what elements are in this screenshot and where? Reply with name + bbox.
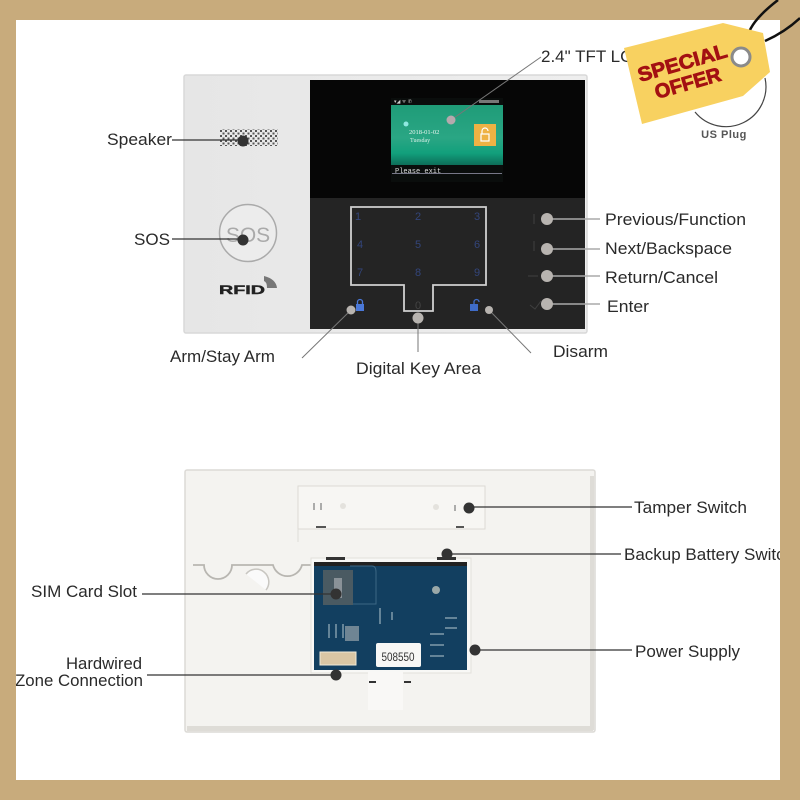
key digits: 5	[415, 239, 421, 251]
special offer tag	[624, 0, 800, 124]
digital key outline	[351, 207, 486, 311]
callout labels: Power Supply	[635, 642, 740, 661]
LCD screen: 2018-01-02	[409, 129, 439, 136]
SIM holder	[323, 570, 353, 605]
small chip	[345, 626, 359, 641]
keypad fascia	[310, 198, 585, 329]
callout labels: SOS	[134, 230, 170, 249]
LCD screen: Tuesday	[410, 138, 430, 144]
callout labels: Enter	[607, 297, 649, 316]
SOS button	[220, 204, 276, 262]
PCB: 508550	[382, 650, 415, 664]
LCD screen	[391, 98, 503, 182]
key digits	[355, 211, 480, 312]
callout labels: Backup Battery Switch	[624, 545, 794, 564]
side key glyphs	[528, 214, 541, 309]
callout labels: Hardwired	[66, 654, 142, 673]
key digits: 3	[474, 211, 480, 223]
US plug circle: US Plug	[701, 129, 747, 141]
callout labels: Return/Cancel	[605, 268, 718, 287]
front panel device	[184, 75, 587, 333]
special offer tag: OFFER	[652, 64, 724, 104]
callout labels: SIM Card Slot	[31, 582, 137, 601]
black fascia	[310, 80, 585, 198]
callout labels	[15, 47, 794, 690]
sticker	[376, 643, 421, 667]
RFID logo	[219, 276, 277, 297]
speaker grille	[220, 129, 278, 146]
key digits: 7	[357, 267, 363, 279]
PCB	[311, 557, 471, 673]
key digits: 6	[474, 239, 480, 251]
knockouts	[193, 565, 314, 579]
key digits: 1	[355, 211, 361, 223]
key digits: 4	[357, 239, 363, 251]
LCD screen: ▾◢ ᯤ ✆	[394, 99, 412, 105]
callout dots	[238, 116, 553, 680]
callout labels: Zone Connection	[15, 671, 143, 690]
callout labels: Speaker	[107, 130, 172, 149]
key digits: 9	[474, 267, 480, 279]
lock icons	[356, 300, 479, 311]
SOS button: SOS	[226, 224, 270, 247]
callout labels: Disarm	[553, 342, 608, 361]
callout labels: Next/Backspace	[605, 239, 732, 258]
key digits: 0	[415, 300, 421, 312]
white connector	[320, 652, 356, 665]
callout labels: Digital Key Area	[356, 359, 482, 378]
rear panel device	[185, 470, 595, 732]
tamper door	[298, 486, 485, 542]
key digits: 2	[415, 211, 421, 223]
callout labels: Tamper Switch	[634, 498, 747, 517]
callout labels: Arm/Stay Arm	[170, 347, 275, 366]
callout lines	[142, 57, 632, 675]
RFID logo: RFID	[219, 283, 266, 297]
key digits: 8	[415, 267, 421, 279]
callout labels: Previous/Function	[605, 210, 746, 229]
LCD screen: Please exit	[395, 168, 441, 176]
US plug circle	[695, 78, 766, 141]
callout labels: 2.4" TFT LCD	[541, 47, 645, 66]
special offer tag: SPECIAL	[635, 40, 730, 87]
